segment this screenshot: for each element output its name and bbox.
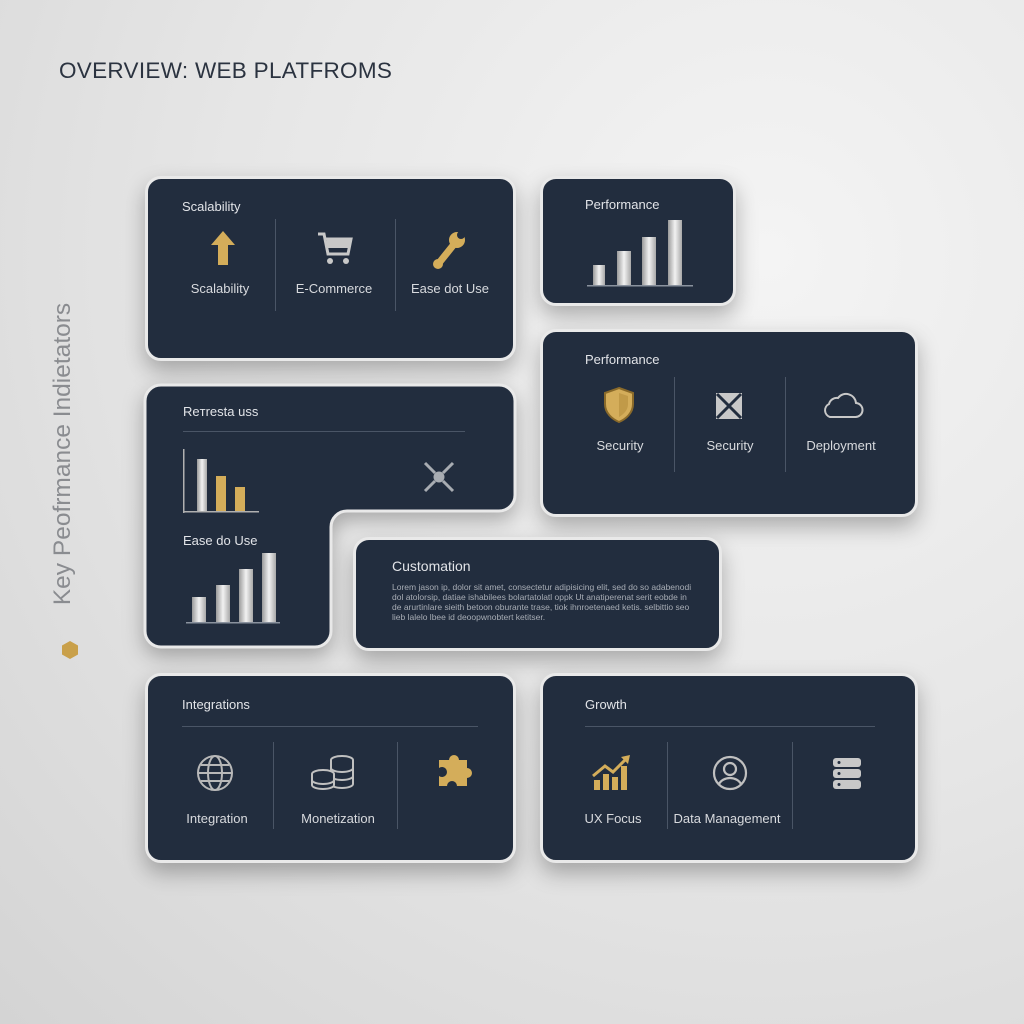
panel: customation	[353, 537, 722, 651]
panel: security	[540, 329, 918, 517]
panel: security: Deployment	[806, 438, 876, 453]
icon: puzzle	[439, 755, 472, 786]
panel: L-shape usage	[132, 380, 528, 668]
icon: globe	[197, 755, 233, 791]
panel: L-shape usage: Reтresta uss	[183, 404, 258, 419]
panel: security: Security	[707, 438, 753, 453]
side label: Key Peofrmance Indietators	[49, 303, 76, 605]
panel: scalability: Scalability	[182, 199, 241, 214]
icon: cloud	[824, 392, 864, 418]
panel: integrations: Integrations	[182, 697, 250, 712]
panel: performance chart: Performance	[585, 197, 659, 212]
bar chart	[587, 220, 693, 286]
panel: scalability: Scalability	[191, 281, 249, 296]
panel: integrations: Integration	[186, 811, 248, 826]
icon: expand arrows	[424, 462, 454, 492]
panel: growth: UX Focus	[584, 811, 642, 826]
panel: scalability	[145, 176, 516, 361]
panel: growth: Growth	[585, 697, 627, 712]
icon: arrow up	[211, 231, 235, 265]
icon: cart	[318, 232, 353, 264]
panel: customation: Lorem jason ip, dolor sit amet, consectetur adipisicing elit, sed do so adabenodi dol atolorsip, datiae ishabilees bolartatolatl oppk Ut anatiperenat serit eobde in de arurtinlare sieith betoon oburante trase, tiok ihnroetenaed ketis. selbittio seo lieb lalelo lbee id deoopwnobtert ketitser.	[392, 582, 691, 622]
icon: box x	[716, 393, 742, 419]
icon: wrench	[433, 232, 465, 269]
bar chart: ease	[186, 553, 280, 624]
panel: customation: Customation	[392, 558, 471, 574]
bar chart: small	[183, 449, 259, 513]
icon: gold hexagon	[62, 641, 78, 659]
panel: security: Security	[597, 438, 643, 453]
icon: coins	[311, 755, 354, 790]
panel: security: Performance	[585, 352, 659, 367]
panel: L-shape usage: Ease do Use	[183, 533, 257, 548]
panel: scalability: Ease dot Use	[411, 281, 489, 296]
icon: growth chart	[592, 755, 630, 790]
panel: scalability: E-Commerce	[296, 281, 372, 296]
panel: growth: Data Management	[674, 811, 780, 826]
panel: integrations: Monetization	[301, 811, 375, 826]
title: OVERVIEW: WEB PLATFROMS	[59, 58, 392, 83]
panel: performance chart	[540, 176, 736, 306]
icon: shield	[604, 387, 634, 423]
icon: database	[833, 758, 861, 789]
panel: growth	[540, 673, 918, 863]
icon: user	[712, 756, 748, 790]
panel: integrations	[145, 673, 516, 863]
